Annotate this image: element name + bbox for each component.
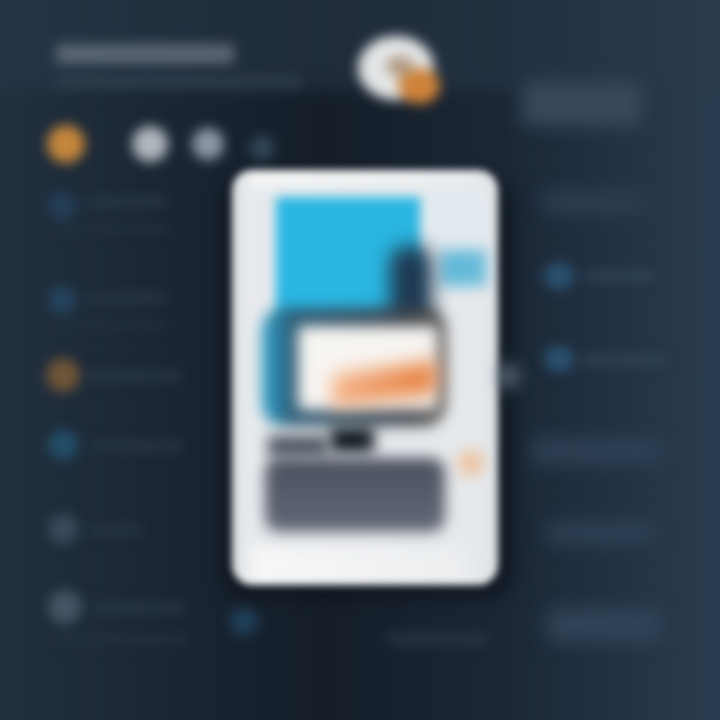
right item five xyxy=(548,522,654,544)
background glow xyxy=(0,0,720,90)
orange highlight xyxy=(332,361,436,407)
right item six xyxy=(548,608,662,642)
panel: left list xyxy=(40,190,180,628)
subtitle xyxy=(56,78,301,86)
monitor stand xyxy=(330,428,374,452)
text block: top right heading xyxy=(522,82,642,126)
white inner panel xyxy=(298,326,438,410)
right item three xyxy=(540,342,656,377)
top right block xyxy=(424,192,486,250)
list item four xyxy=(44,426,176,464)
panel: right list xyxy=(530,188,660,646)
icon: orange tab xyxy=(47,125,85,163)
connector dot xyxy=(498,366,516,386)
shadow xyxy=(222,178,512,598)
panel: bottom captions xyxy=(226,604,481,646)
panel: phone card xyxy=(232,170,498,585)
list item three xyxy=(40,352,176,398)
caption text xyxy=(388,633,488,645)
icon: gray tab one xyxy=(132,126,168,162)
inner light tint xyxy=(248,186,482,546)
cyan small block xyxy=(440,250,486,286)
icon: dark tab xyxy=(250,136,274,160)
orange dot xyxy=(458,450,484,476)
keyboard xyxy=(265,458,445,532)
dark silhouette xyxy=(390,246,432,330)
icon: gray tab two xyxy=(192,128,224,160)
dark strip xyxy=(268,436,328,456)
list item five xyxy=(46,512,130,546)
right item one xyxy=(544,190,644,214)
icon: top badge xyxy=(349,26,448,113)
title xyxy=(56,44,234,64)
list item six xyxy=(44,586,180,628)
caption icon xyxy=(230,607,258,635)
blue image block xyxy=(276,197,422,332)
right item four xyxy=(532,438,662,464)
list item one xyxy=(46,190,162,223)
right item two xyxy=(540,257,647,294)
list item two xyxy=(45,283,160,318)
central dark card xyxy=(262,308,446,426)
